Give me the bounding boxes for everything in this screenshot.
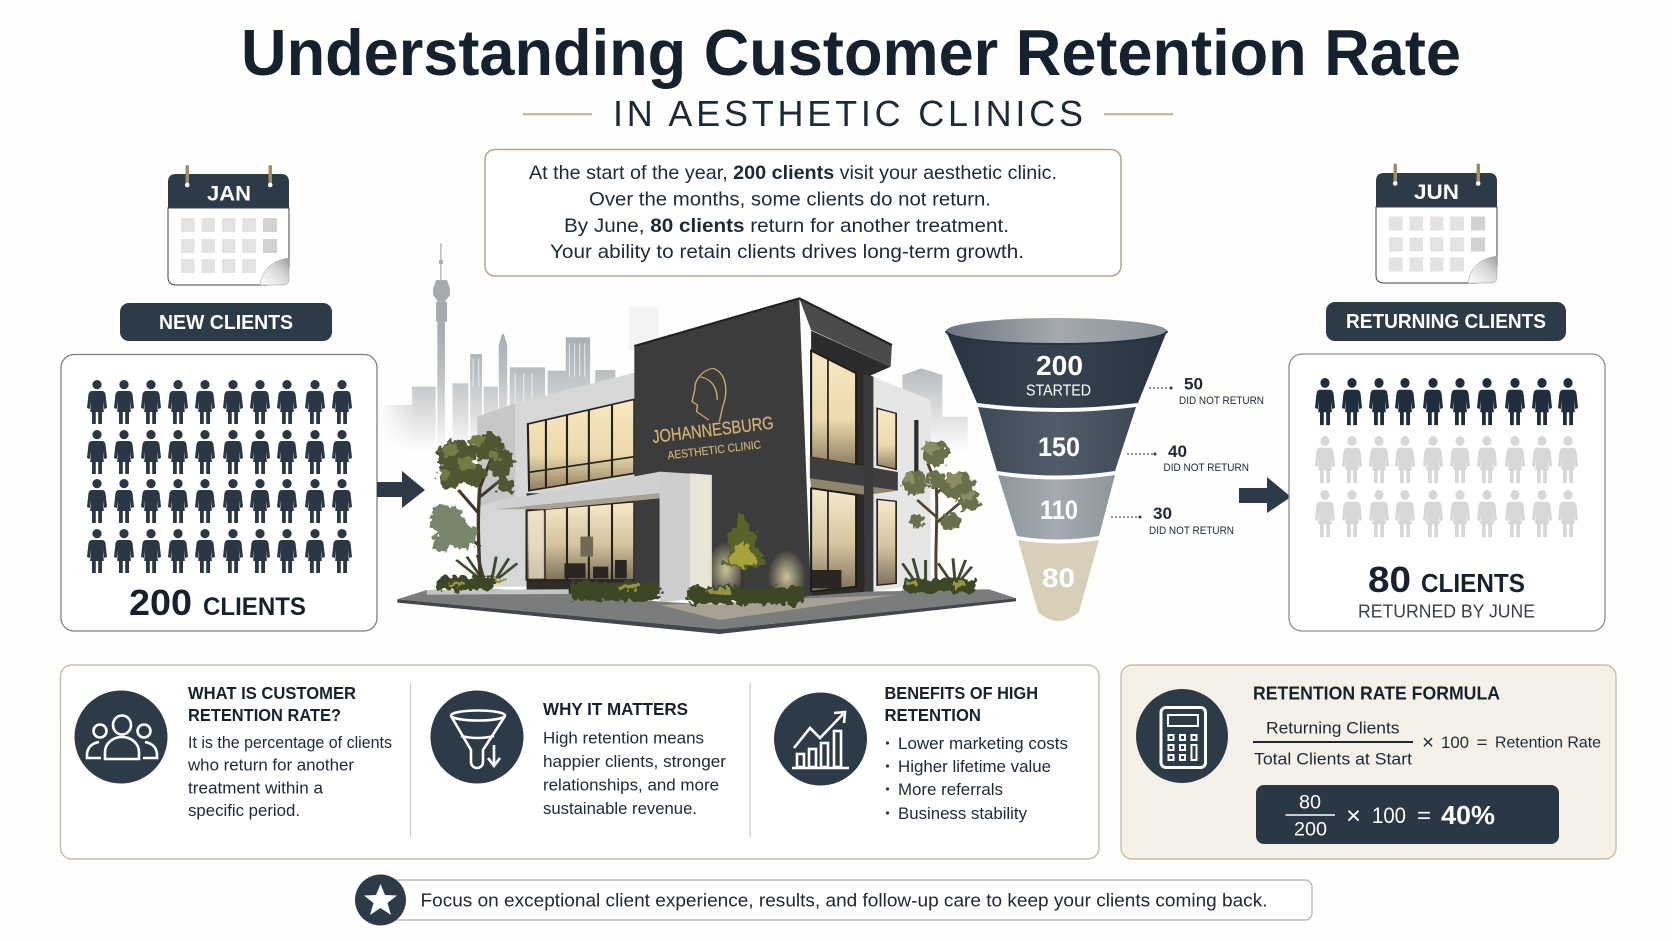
label: returning clients (1326, 302, 1566, 341)
label: new clients: NEW CLIENTS (159, 312, 293, 334)
subtitle: IN AESTHETIC CLINICS (613, 93, 1083, 134)
body text: who return for another (187, 756, 355, 774)
body text (543, 730, 727, 818)
general formula: 100 (1441, 733, 1469, 752)
bullet list: Higher lifetime value (898, 758, 1051, 776)
heading: WHAT IS CUSTOMER (188, 683, 356, 703)
logo: face line art (692, 368, 726, 422)
heading: WHY IT MATTERS (543, 699, 688, 719)
footer callout (355, 874, 1312, 926)
callout: 30 did not return: 30 (1153, 504, 1172, 523)
bullet list: Lower marketing costs (898, 735, 1068, 753)
right white wall (871, 376, 931, 592)
funnel stage: 110: 110 (1040, 495, 1078, 525)
tower glazing (811, 351, 856, 465)
bullet list (886, 735, 1068, 823)
footer callout: Focus on exceptional client experience, results, and follow-up care to keep your clients coming back. (420, 890, 1268, 910)
balcony (810, 457, 898, 491)
worked example: 40% (1441, 800, 1495, 830)
worked example: × (1346, 802, 1361, 830)
body text (187, 734, 392, 820)
funnel stage: 150 (978, 407, 1136, 476)
icon: June calendar: JUN (1414, 181, 1459, 204)
card: what is customer retention rate: RETENTION RATE? (188, 705, 341, 725)
worked example: 100 (1372, 803, 1406, 828)
body text: sustainable revenue. (543, 800, 697, 818)
card: benefits of high retention (774, 683, 1068, 823)
ground plaza (397, 589, 1016, 629)
bullet list: Business stability (898, 805, 1028, 823)
pictogram: 40 client figures (87, 380, 352, 573)
bullet list: More referrals (898, 781, 1003, 799)
lit conifer (741, 563, 744, 589)
lower glazing (527, 502, 634, 580)
clinic sign: JOHANNESBURG (651, 413, 775, 447)
callout: 40 did not return: DID NOT RETURN (1164, 462, 1249, 474)
general formula (1253, 720, 1601, 768)
funnel stage: 200 started (946, 318, 1167, 408)
callout: 30 did not return: DID NOT RETURN (1149, 525, 1234, 537)
general formula: Retention Rate (1495, 734, 1601, 752)
intro text box: At the start of the year, 200 clients visit your aesthetic clinic. (529, 162, 1057, 184)
general formula: Total Clients at Start (1254, 750, 1412, 768)
worked example: 200 (1294, 820, 1327, 840)
upper glazing (528, 399, 634, 491)
entrance pillar (660, 472, 712, 603)
general formula: = (1476, 733, 1488, 752)
icon: January calendar: JAN (207, 182, 251, 206)
count: 80 clients: CLIENTS (1421, 568, 1525, 598)
funnel stage: 200 started: 200 (1036, 350, 1083, 381)
icon: growth chart (774, 692, 867, 786)
body text: happier clients, stronger (543, 753, 727, 771)
icon: funnel with arrow (430, 690, 524, 784)
heading: RETENTION RATE FORMULA (1253, 684, 1500, 704)
count: 80 clients: RETURNED BY JUNE (1358, 600, 1535, 622)
illustration: clinic building with skyline (378, 243, 1016, 634)
icon: star (355, 874, 406, 926)
body text: It is the percentage of clients (188, 734, 392, 752)
general formula: × (1422, 732, 1434, 754)
heading: BENEFITS OF HIGH (884, 683, 1038, 703)
pictogram: lost clients rows (1315, 436, 1578, 537)
right tree (917, 463, 959, 581)
callout: 40 did not return: 40 (1168, 442, 1187, 461)
clinic sign (651, 413, 777, 464)
panel: returning clients pictogram (1289, 354, 1605, 631)
funnel stage: 200 started: STARTED (1026, 382, 1091, 400)
label: new clients (120, 303, 332, 341)
tower (634, 298, 811, 597)
funnel stage: 80: 80 (1042, 563, 1075, 593)
worked example (1256, 785, 1559, 844)
body text: treatment within a (188, 780, 324, 798)
clinic sign: AESTHETIC CLINIC (667, 439, 762, 462)
pictogram: returned clients row (1315, 378, 1578, 425)
worked example: 80 (1299, 792, 1321, 814)
label: returning clients: RETURNING CLIENTS (1346, 311, 1546, 333)
skyline (378, 243, 968, 454)
title: Understanding Customer Retention Rate (241, 16, 1461, 89)
callout: 50 did not return (1149, 374, 1264, 407)
left tree (458, 457, 505, 578)
body text: specific period. (188, 802, 300, 820)
panel: new clients pictogram (61, 354, 377, 631)
body text: relationships, and more (543, 776, 719, 794)
icon: January calendar (168, 165, 289, 285)
count: 200 clients (129, 582, 306, 623)
wall light glows (707, 542, 745, 598)
card: why it matters (430, 690, 727, 818)
count: 200 clients: CLIENTS (203, 593, 306, 621)
left wing (477, 373, 634, 587)
worked example: = (1417, 803, 1431, 828)
card: benefits of high retention: RETENTION (884, 705, 981, 725)
intro text box: Your ability to retain clients drives long-term growth. (550, 241, 1024, 263)
funnel stage: 150: 150 (1038, 432, 1080, 462)
count: 200 clients: 200 (129, 582, 192, 623)
hedges (437, 576, 976, 604)
column (863, 374, 873, 593)
callout: 50 did not return: 50 (1184, 374, 1203, 394)
icon: June calendar (1376, 164, 1497, 283)
callout: 30 did not return (1111, 504, 1234, 537)
intro text box: By June, 80 clients return for another treatment. (564, 215, 1009, 237)
general formula: Returning Clients (1266, 720, 1400, 738)
callout: 50 did not return: DID NOT RETURN (1179, 395, 1264, 407)
callout: 40 did not return (1127, 442, 1249, 474)
agave (456, 555, 972, 582)
count: 80 clients: 80 (1368, 559, 1411, 600)
panel: retention rate formula (1121, 665, 1616, 859)
body text: High retention means (543, 730, 704, 748)
icon: calculator (1136, 689, 1228, 783)
chart: retention funnel (946, 318, 1264, 621)
funnel stage: 80 (1018, 540, 1099, 621)
funnel stage: 110 (998, 475, 1115, 540)
intro text box: Over the months, some clients do not return. (589, 188, 991, 210)
card: what is customer retention rate (74, 683, 392, 820)
entrance canopy (494, 472, 660, 509)
count: 80 clients (1358, 559, 1535, 622)
dark base behind canopy (527, 493, 661, 593)
arrow: funnel to returning clients (1239, 477, 1291, 513)
intro text box (485, 150, 1121, 276)
panel: explanation cards (60, 665, 1099, 859)
icon: people group (74, 690, 168, 784)
arrow: new clients to clinic (377, 471, 425, 508)
